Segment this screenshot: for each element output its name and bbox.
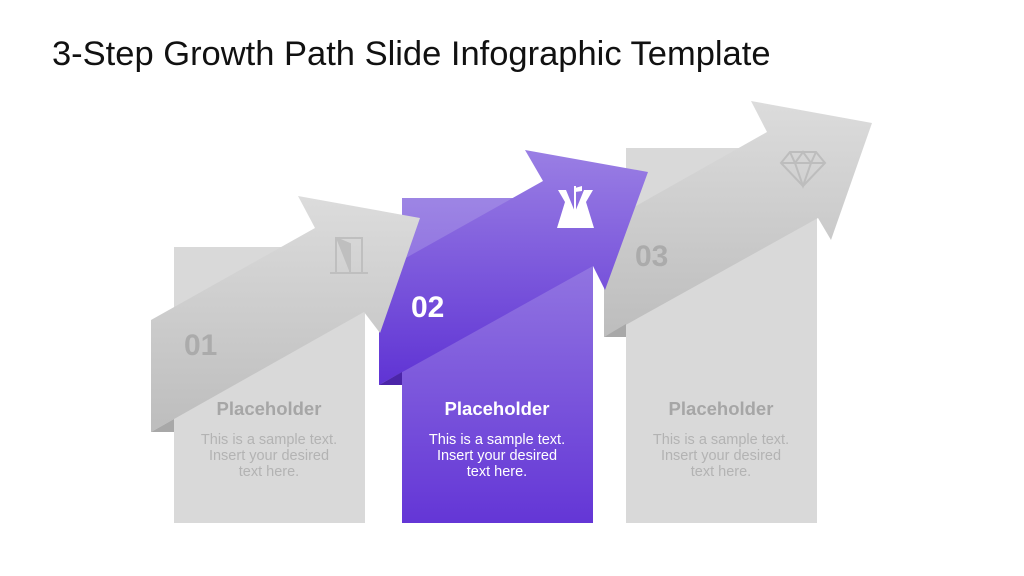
text block: step 3: Placeholder xyxy=(669,398,773,419)
text block: step 1 xyxy=(201,398,337,480)
text block: step 1: This is a sample text. xyxy=(201,432,337,448)
number 02: 02 xyxy=(411,291,444,324)
number 03: 03 xyxy=(635,240,668,273)
text block: step 2 xyxy=(429,398,565,480)
text block: step 2: Insert your desired xyxy=(437,448,557,464)
text block: step 2: text here. xyxy=(467,464,527,480)
text block: step 3: This is a sample text. xyxy=(653,432,789,448)
text block: step 2: Placeholder xyxy=(445,398,549,419)
icon: road xyxy=(557,186,594,228)
panel: step 1 box xyxy=(174,247,365,523)
icon: door xyxy=(330,238,368,273)
text block: step 1: text here. xyxy=(239,464,299,480)
text block: step 1: Placeholder xyxy=(217,398,321,419)
number 01: 01 xyxy=(184,329,217,362)
arrow: step 2 xyxy=(379,150,648,385)
text block: step 2: This is a sample text. xyxy=(429,432,565,448)
text block: step 3: text here. xyxy=(691,464,751,480)
panel: step 3 box xyxy=(626,148,817,523)
arrow: step 1 xyxy=(151,196,420,432)
text block: step 3 xyxy=(653,398,789,480)
panel: step 2 box xyxy=(402,198,593,523)
icon: diamond xyxy=(781,152,825,186)
text block: step 3: Insert your desired xyxy=(661,448,781,464)
arrow: step 3 xyxy=(604,101,872,337)
text block: step 1: Insert your desired xyxy=(209,448,329,464)
title: 3-Step Growth Path Slide Infographic Template xyxy=(52,35,771,73)
